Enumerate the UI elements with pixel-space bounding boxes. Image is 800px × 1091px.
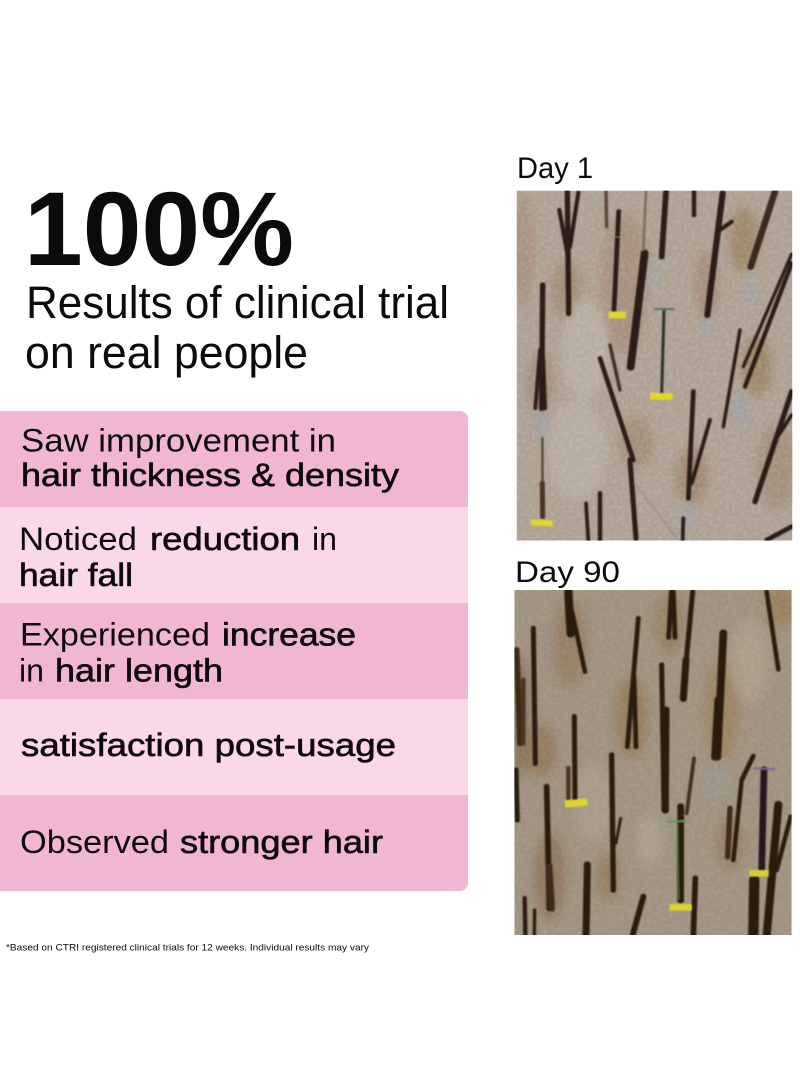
panel: clinical results list [0, 411, 468, 891]
label: Day 1: Day 1 [517, 152, 593, 185]
hair strands [516, 592, 791, 935]
row: reduction in hair fall [0, 507, 468, 603]
subheading: results of clinical trial [25, 277, 449, 378]
photo: scalp on day 90 [510, 587, 793, 935]
row: increase in hair length: Experienced [20, 616, 210, 652]
row: hair thickness and density [0, 411, 468, 507]
headline: 100%: 100% [24, 171, 294, 288]
row: hair thickness and density: Saw improvement in [21, 422, 336, 458]
subheading: results of clinical trial: on real people [25, 327, 308, 378]
row: stronger hair: stronger hair [180, 824, 383, 860]
row: stronger hair: Observed [20, 824, 169, 860]
measurement markers [565, 768, 775, 907]
measurement markers [531, 237, 675, 523]
row: increase in hair length: increase [222, 616, 356, 652]
row: satisfaction post-usage: satisfaction post-usage [21, 727, 396, 763]
row: reduction in hair fall: Noticed [19, 521, 137, 557]
row: reduction in hair fall: reduction [150, 521, 300, 557]
photo: scalp on day 1 [513, 191, 797, 541]
row: reduction in hair fall: in [312, 521, 337, 557]
row: increase in hair length [0, 603, 468, 699]
row: increase in hair length: hair length [55, 652, 223, 688]
subheading: results of clinical trial: Results of clinical trial [26, 277, 449, 328]
row: increase in hair length: in [19, 652, 44, 688]
row: reduction in hair fall: hair fall [19, 557, 133, 593]
hair strands [535, 192, 792, 540]
footnote: *Based on CTRI registered clinical trials for 12 weeks. Individual results may vary [6, 942, 369, 954]
label: Day 90: Day 90 [515, 556, 620, 589]
row: satisfaction post-usage [0, 699, 468, 795]
row: hair thickness and density: hair thickness & density [21, 457, 399, 493]
row: stronger hair [0, 795, 468, 891]
